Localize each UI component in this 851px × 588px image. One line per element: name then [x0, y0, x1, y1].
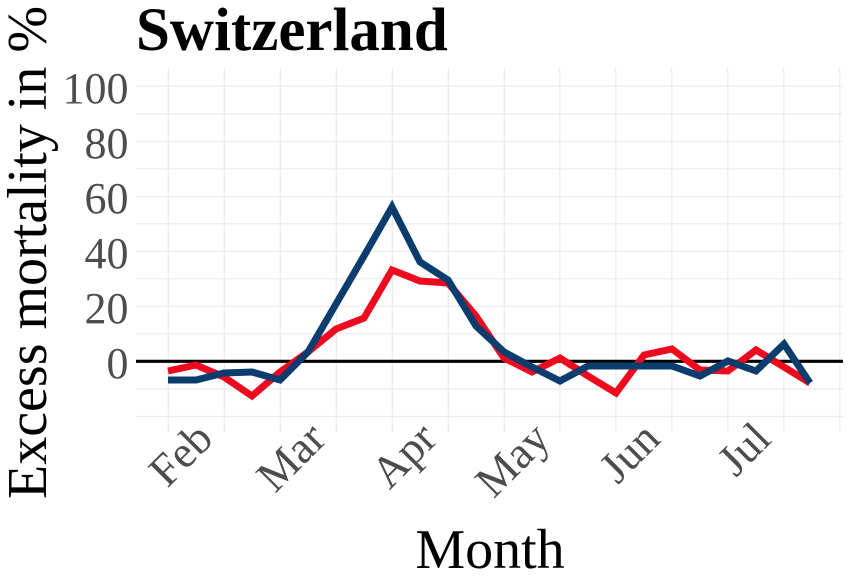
red data line [168, 270, 810, 396]
zero reference line [136, 360, 843, 363]
x axis tick labels [139, 412, 780, 506]
x axis tick labels: Apr [361, 413, 446, 498]
y axis tick labels: 100 [62, 64, 128, 113]
y axis tick labels: 40 [84, 229, 128, 278]
x axis tick labels: Jun [590, 413, 669, 492]
x axis tick labels: Feb [139, 413, 222, 496]
x axis tick labels: Mar [247, 413, 335, 501]
blue data line [168, 207, 810, 383]
y axis tick labels [62, 64, 128, 388]
x axis tick labels: May [465, 412, 559, 506]
x axis title: Month [415, 519, 565, 581]
y axis tick labels: 80 [84, 119, 128, 168]
y axis tick labels: 0 [106, 339, 128, 388]
y axis tick labels: 20 [84, 284, 128, 333]
y axis tick labels: 60 [84, 174, 128, 223]
x axis tick labels: Jul [708, 413, 780, 485]
